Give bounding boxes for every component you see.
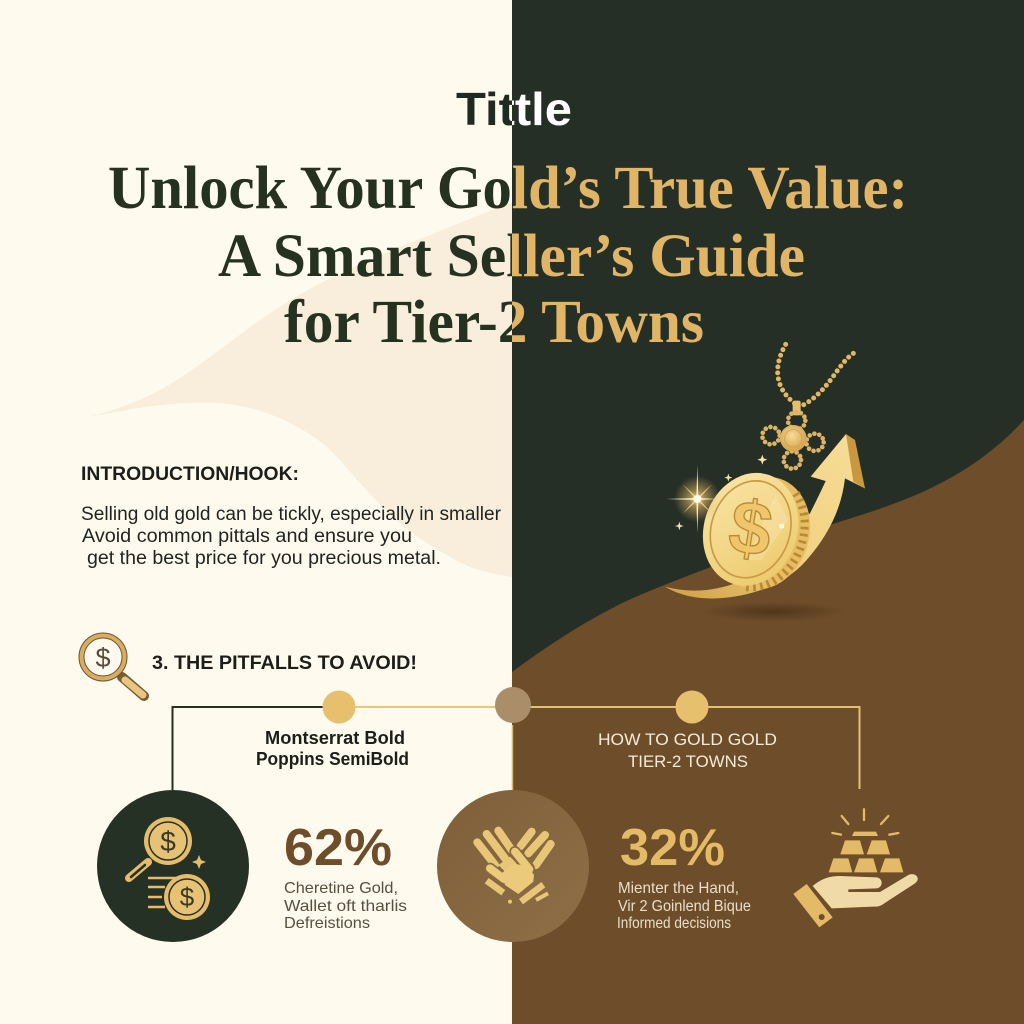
illustration: gold coin, arrow and necklace (665, 344, 865, 622)
stat caption: Vir 2 Goinlend Bique (618, 898, 751, 915)
stat caption: Informed decisions (617, 915, 731, 932)
arrowhead shading (846, 434, 865, 488)
stat caption (284, 880, 407, 932)
introduction line 3: get the best price for you precious metal. (87, 548, 441, 569)
gold bar rays (832, 809, 898, 835)
introduction heading: INTRODUCTION/HOOK: (81, 464, 299, 485)
stat caption: Wallet oft tharlis (284, 898, 407, 915)
label line 2: Poppins SemiBold (256, 749, 409, 769)
coin face (689, 460, 813, 598)
stat caption: Cheretine Gold, (284, 880, 398, 897)
coin shadow (700, 602, 847, 622)
background: dark green right half (512, 0, 1024, 1024)
icon: sparkle (192, 855, 206, 869)
label: fonts (256, 728, 409, 769)
timeline node right (676, 690, 708, 724)
small title: Tittle (456, 83, 572, 135)
heading line 3: for Tier-2 Towns (284, 289, 704, 356)
wrist cuffs (487, 881, 548, 902)
icon: magnifier with dollar (79, 633, 144, 696)
background: cream left half (0, 0, 512, 1024)
knuckle block (498, 857, 517, 872)
stat caption (617, 880, 751, 932)
stat caption: Mienter the Hand, (618, 880, 739, 897)
icon: hand holding gold bars (793, 809, 918, 927)
icon: magnifier coin: $ (160, 826, 176, 857)
stat: 32 percent (617, 819, 751, 932)
back fingers (477, 831, 551, 865)
icon: magnifier with dollar: $ (95, 643, 111, 673)
background: brown wave on right half (512, 420, 1024, 1024)
stat: 62 percent (284, 819, 407, 932)
front hand outline (490, 852, 529, 878)
dark circle with coin magnifier icon (97, 790, 249, 942)
section heading: pitfalls: 3. THE PITFALLS TO AVOID! (152, 653, 417, 674)
icon: clasped hands (477, 831, 551, 904)
coin dollar sign: $ (724, 483, 778, 573)
front palm (502, 863, 534, 894)
coin ridges (743, 493, 805, 587)
hand cuff (793, 884, 833, 927)
main heading (108, 155, 908, 356)
label line 1: HOW TO GOLD GOLD (598, 730, 777, 749)
timeline node center (495, 687, 531, 723)
timeline connector (172, 707, 860, 790)
stat number: 62% (284, 819, 392, 877)
introduction line 2: Avoid common pittals and ensure you (82, 526, 412, 547)
coin shine (747, 495, 788, 560)
large sparkle (666, 465, 727, 533)
heading line 2: A Smart Seller’s Guide (218, 223, 805, 290)
background: pale wave on left half (88, 203, 512, 577)
icon: magnifier coin (129, 817, 192, 878)
label line 2: TIER-2 TOWNS (628, 752, 748, 771)
front fingers (490, 852, 529, 879)
necklace pendant (762, 401, 824, 469)
introduction line 1: Selling old gold can be tickly, especially in smaller (81, 504, 502, 525)
rising arrow (665, 434, 865, 598)
small sparkles (675, 455, 767, 530)
necklace chain (778, 344, 853, 405)
coin (689, 460, 824, 602)
coin edge (700, 464, 824, 602)
heading line 1: Unlock Your Gold’s True Value: (108, 155, 908, 222)
stat number: 32% (620, 819, 725, 877)
label line 1: Montserrat Bold (265, 728, 405, 748)
icon: moving coin (148, 874, 210, 920)
timeline node left (322, 690, 356, 724)
gold bars (829, 832, 903, 872)
icon: moving coin: $ (180, 882, 195, 912)
open hand (813, 874, 918, 908)
brown circle with hands icon (437, 790, 589, 942)
introduction block (81, 464, 502, 569)
label: how to gold (598, 730, 777, 771)
stat caption: Defreistions (284, 915, 370, 932)
